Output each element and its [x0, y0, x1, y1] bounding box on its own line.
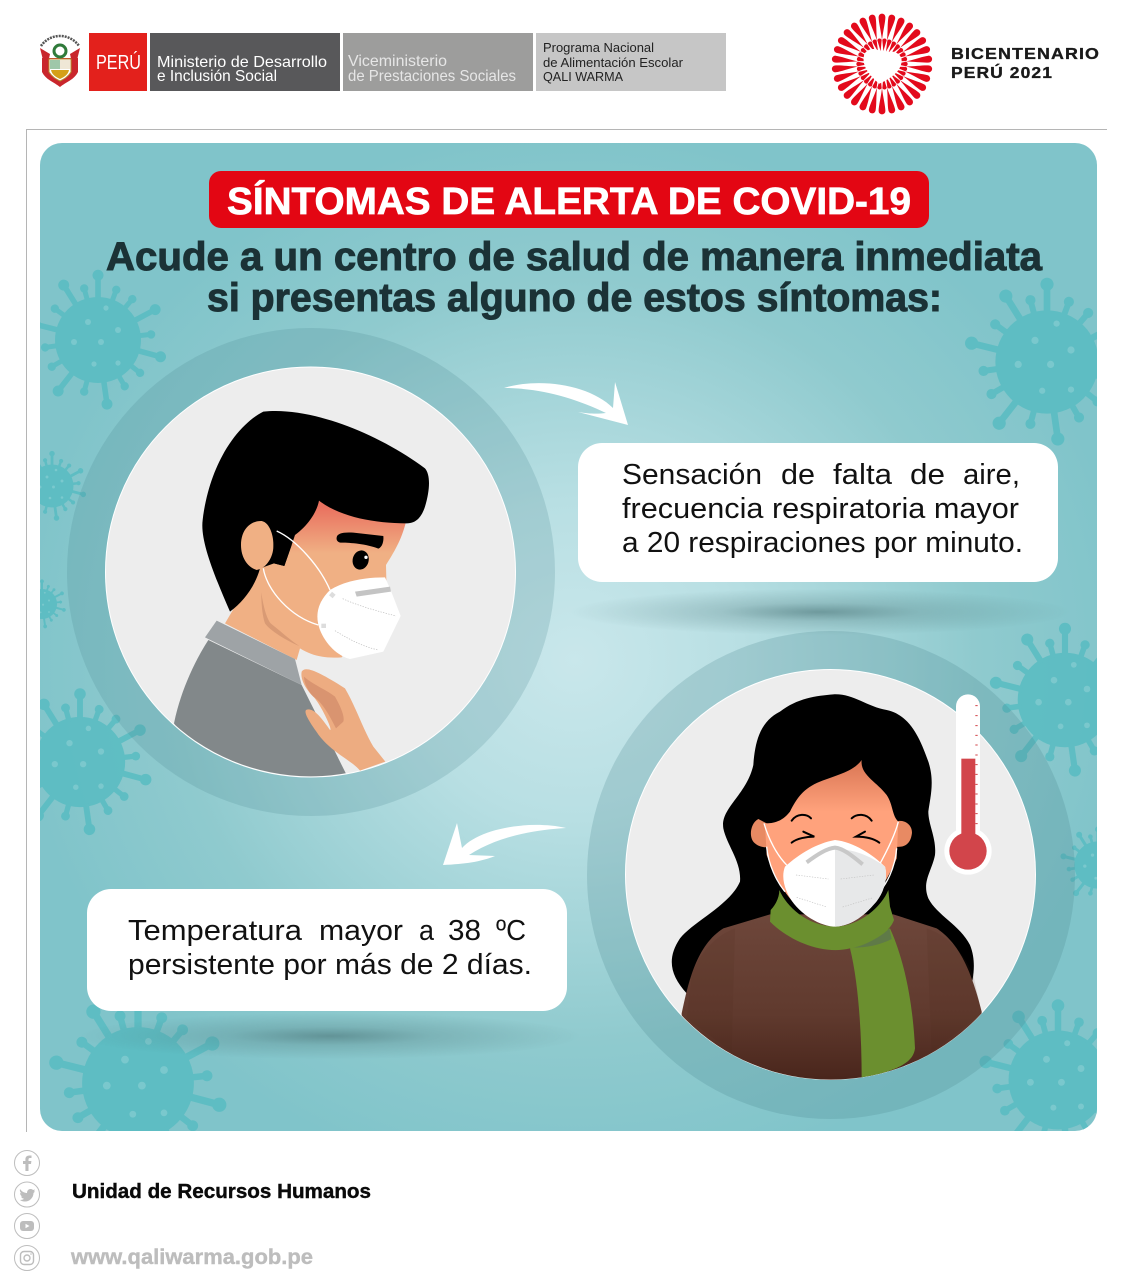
woman: ears [751, 819, 912, 847]
callout: temperature symptom: ºC [496, 915, 526, 947]
header: PERÚ ministry band: de Prestaciones Sociales [348, 68, 516, 85]
header: PERÚ ministry band: Programa Nacional [543, 40, 654, 55]
panel: woman symptom circle [587, 631, 1075, 1119]
man: mask straps [263, 531, 330, 625]
header: PERÚ ministry band: PERÚ [96, 51, 141, 74]
icon: instagram [14, 1246, 40, 1270]
woman: face [765, 760, 898, 925]
header: PERÚ ministry band: e Inclusión Social [157, 68, 277, 85]
icon: bicentenario sun logo [832, 14, 932, 114]
man: sideburn [273, 535, 292, 566]
callout: breathing symptom: aire, [963, 459, 1020, 491]
shadow under temperature callout [80, 1013, 580, 1059]
arrow: to temperature text [443, 823, 566, 865]
callout: breathing symptom: de [781, 459, 815, 491]
bicentenario wordmark: PERÚ 2021 [951, 63, 1053, 82]
footer: website: www.qaliwarma.gob.pe [70, 1246, 313, 1269]
man: ear [241, 521, 273, 570]
callout: temperature symptom: mayor [319, 915, 403, 947]
header: PERÚ ministry band: Ministerio de Desarrollo [157, 54, 327, 71]
woman: mask [783, 840, 886, 927]
callout: breathing symptom: frecuencia respiratoria mayor [622, 493, 1019, 525]
woman: coat [682, 914, 982, 1085]
icon: facebook [14, 1150, 40, 1176]
callout: temperature symptom [87, 889, 567, 1011]
callout: breathing symptom [578, 443, 1058, 582]
arrow: to breathing text [504, 382, 628, 425]
callout: temperature symptom: Temperatura [128, 915, 303, 947]
panel: main teal background [40, 143, 1097, 1131]
callout: breathing symptom: Sensación [622, 459, 762, 491]
woman: scarf tail [850, 928, 915, 1078]
man: mask [317, 577, 401, 659]
title banner: SÍNTOMAS DE ALERTA DE COVID-19 [227, 179, 911, 223]
icon: youtube [14, 1214, 40, 1238]
header: PERÚ ministry band: Viceministerio [348, 53, 447, 70]
man: eye [350, 549, 371, 571]
callout: breathing symptom: de [910, 459, 945, 491]
man: hand [301, 669, 385, 771]
bicentenario wordmark [951, 46, 1100, 82]
header: Peruvian coat of arms [40, 36, 80, 87]
callout: temperature symptom: 38 [448, 915, 481, 947]
man: neck shadow [261, 592, 299, 646]
callout: temperature symptom: a [419, 915, 435, 947]
woman: mask straps [764, 822, 898, 895]
background: virus pattern [40, 270, 1097, 1131]
icon: thermometer [944, 694, 992, 875]
subtitle [106, 235, 1043, 320]
subtitle: Acude a un centro de salud de manera inmediata [106, 235, 1043, 279]
callout: breathing symptom: a 20 respiraciones por minuto. [622, 527, 1023, 559]
header: PERÚ ministry band: de Alimentación Escolar [543, 55, 684, 70]
illustration: man with mask [174, 411, 429, 783]
callout: temperature symptom: persistente por más de 2 días. [128, 949, 532, 981]
callout: breathing symptom: falta [833, 459, 893, 491]
icon: twitter [14, 1182, 40, 1207]
woman: scarf fold shadow [853, 928, 892, 948]
woman: scarf wrap [770, 890, 894, 950]
footer: unit name: Unidad de Recursos Humanos [72, 1181, 371, 1203]
bicentenario wordmark: BICENTENARIO [951, 46, 1100, 63]
header: PERÚ ministry band [89, 33, 726, 91]
panel: man symptom circle [67, 328, 555, 816]
man: collar [205, 621, 302, 685]
man: skin [225, 500, 406, 660]
illustration: woman with mask and fever [672, 694, 992, 1085]
woman: hair [672, 694, 974, 993]
man: hair [202, 411, 429, 612]
header: PERÚ ministry band: QALI WARMA [543, 69, 623, 84]
man: shirt [174, 640, 347, 783]
man: eyebrow [337, 533, 383, 549]
woman: closed eyes [792, 815, 879, 843]
title banner [209, 171, 929, 228]
subtitle: si presentas alguno de estos síntomas: [207, 276, 942, 320]
shadow under breathing callout [570, 589, 1070, 635]
